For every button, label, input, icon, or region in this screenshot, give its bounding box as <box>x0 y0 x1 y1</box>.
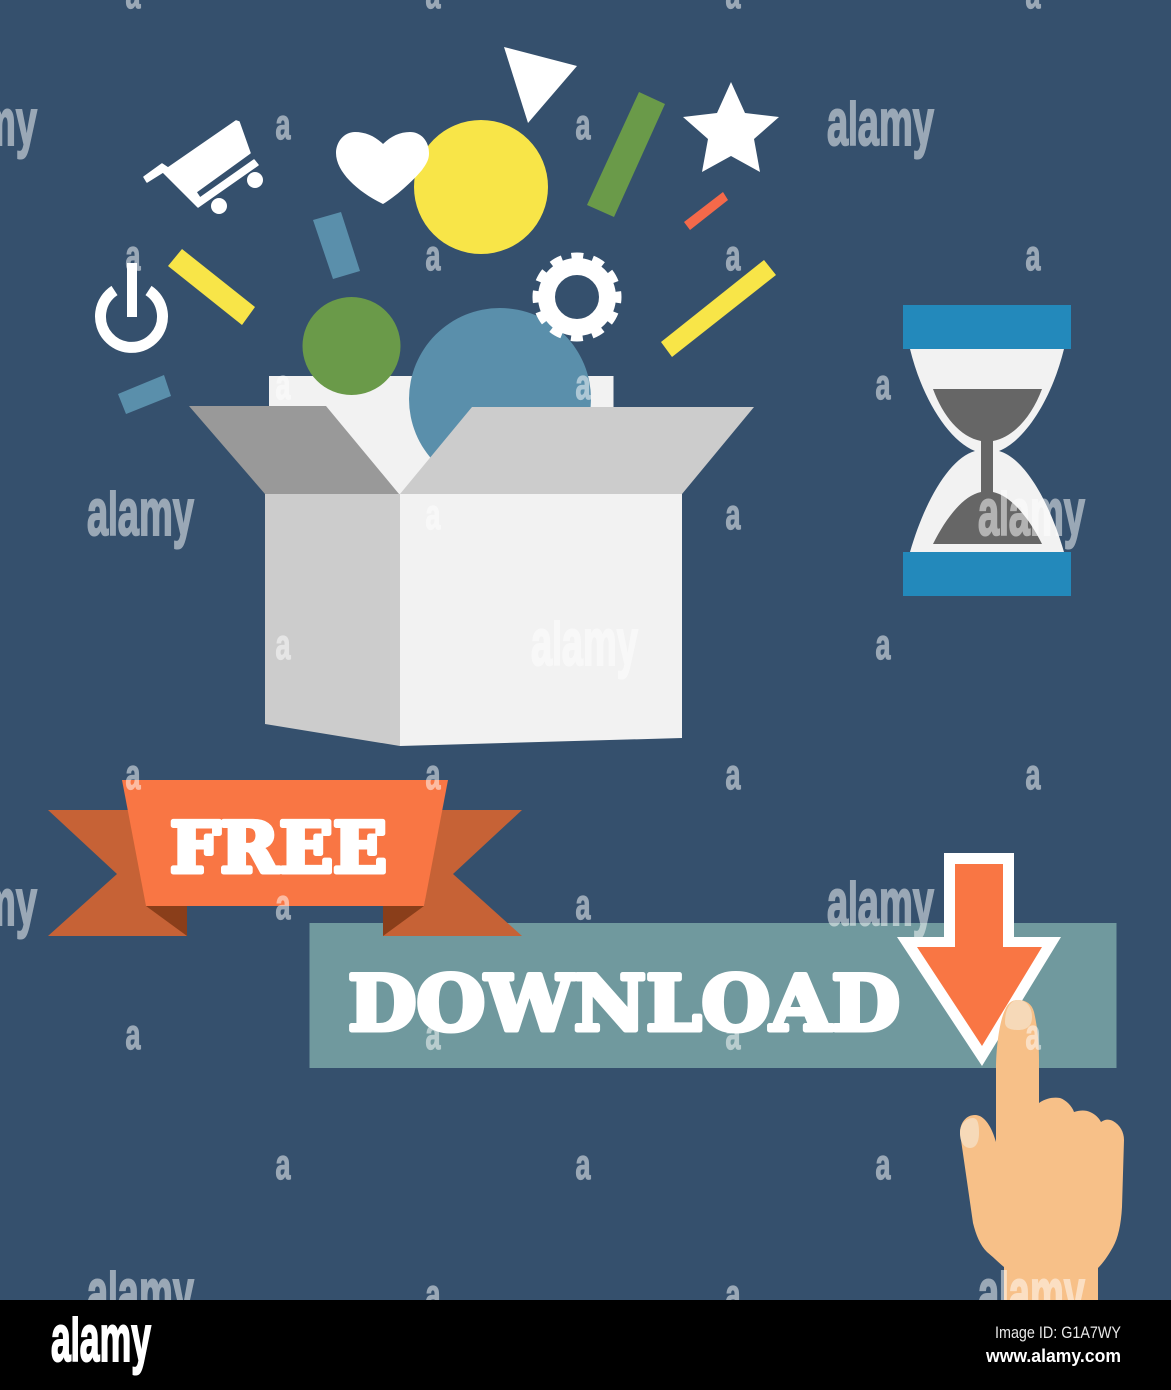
watermark pattern: a <box>426 1271 441 1319</box>
bottom cap <box>903 552 1071 596</box>
footer logo: alamy <box>51 1301 151 1375</box>
box left face <box>265 494 400 746</box>
watermark pattern: a <box>126 1011 141 1059</box>
left yellow bar <box>168 249 255 325</box>
watermark pattern: a <box>726 1271 741 1319</box>
FREE label: FREE <box>170 808 387 889</box>
right box flap <box>400 407 754 494</box>
download button bar <box>310 923 1116 1068</box>
watermark pattern: a <box>876 361 891 409</box>
watermark pattern: a <box>126 232 141 280</box>
watermark pattern: a <box>276 621 291 669</box>
watermark pattern: a <box>426 751 441 799</box>
watermark pattern: a <box>726 1011 741 1059</box>
icon: shopping cart <box>144 121 263 214</box>
green circle <box>302 297 400 395</box>
watermark pattern: a <box>1026 751 1041 799</box>
watermark pattern: a <box>726 491 741 539</box>
icon: gear <box>536 256 618 338</box>
watermark pattern: a <box>1026 232 1041 280</box>
thumb nail <box>960 1118 979 1148</box>
finger nail <box>1005 1000 1032 1030</box>
watermark pattern: a <box>276 101 291 149</box>
watermark pattern: alamy <box>978 475 1085 549</box>
open box with items flying out <box>189 297 754 746</box>
small red bar <box>684 192 728 230</box>
left box flap <box>189 406 399 494</box>
box right face <box>400 494 682 746</box>
ribbon centre <box>122 780 448 906</box>
watermark pattern: a <box>426 1011 441 1059</box>
watermark pattern: alamy <box>531 605 638 679</box>
image id: Image ID: G1A7WY <box>995 1323 1121 1342</box>
website: www.alamy.com <box>985 1346 1121 1366</box>
watermark pattern: a <box>876 1141 891 1189</box>
watermark pattern: a <box>126 751 141 799</box>
watermark pattern: a <box>726 751 741 799</box>
watermark pattern: a <box>576 1141 591 1189</box>
right yellow bar <box>661 260 776 357</box>
watermark pattern: a <box>276 1141 291 1189</box>
top cap <box>903 305 1071 349</box>
right fold <box>383 906 424 936</box>
watermark pattern: alamy <box>87 475 194 549</box>
left ribbon tail <box>48 810 187 936</box>
green bar <box>587 92 665 217</box>
watermark pattern: a <box>726 232 741 280</box>
left fold <box>146 906 187 936</box>
paper inside box <box>269 376 614 500</box>
watermark pattern: a <box>876 621 891 669</box>
watermark pattern: a <box>1026 1011 1041 1059</box>
blue bar <box>313 212 360 279</box>
watermark pattern: a <box>276 361 291 409</box>
small blue rectangle <box>118 375 171 414</box>
watermark pattern: a <box>576 881 591 929</box>
watermark pattern: a <box>426 491 441 539</box>
glass body <box>910 349 1064 552</box>
icon: star <box>683 82 779 172</box>
DOWNLOAD label: DOWNLOAD <box>348 959 900 1048</box>
icon: hourglass <box>903 305 1071 596</box>
watermark pattern: alamy <box>827 85 934 159</box>
icon: download arrow <box>897 853 1061 1066</box>
watermark pattern: a <box>576 101 591 149</box>
watermark pattern: a <box>276 881 291 929</box>
watermark pattern: alamy <box>827 865 934 939</box>
icon: white triangle <box>504 47 577 123</box>
watermark pattern: alamy <box>87 1255 194 1329</box>
icon: heart <box>336 132 429 204</box>
icon: power symbol <box>100 263 162 347</box>
footer bar <box>0 1300 1171 1390</box>
free ribbon <box>48 780 522 936</box>
watermark pattern: a <box>426 232 441 280</box>
right ribbon tail <box>383 810 522 936</box>
top sand <box>933 389 1042 544</box>
watermark pattern: a <box>576 361 591 409</box>
icon: pointing hand <box>960 1000 1124 1300</box>
watermark pattern: alamy <box>978 1255 1085 1329</box>
large blue circle <box>409 308 591 490</box>
yellow circle <box>414 120 548 254</box>
